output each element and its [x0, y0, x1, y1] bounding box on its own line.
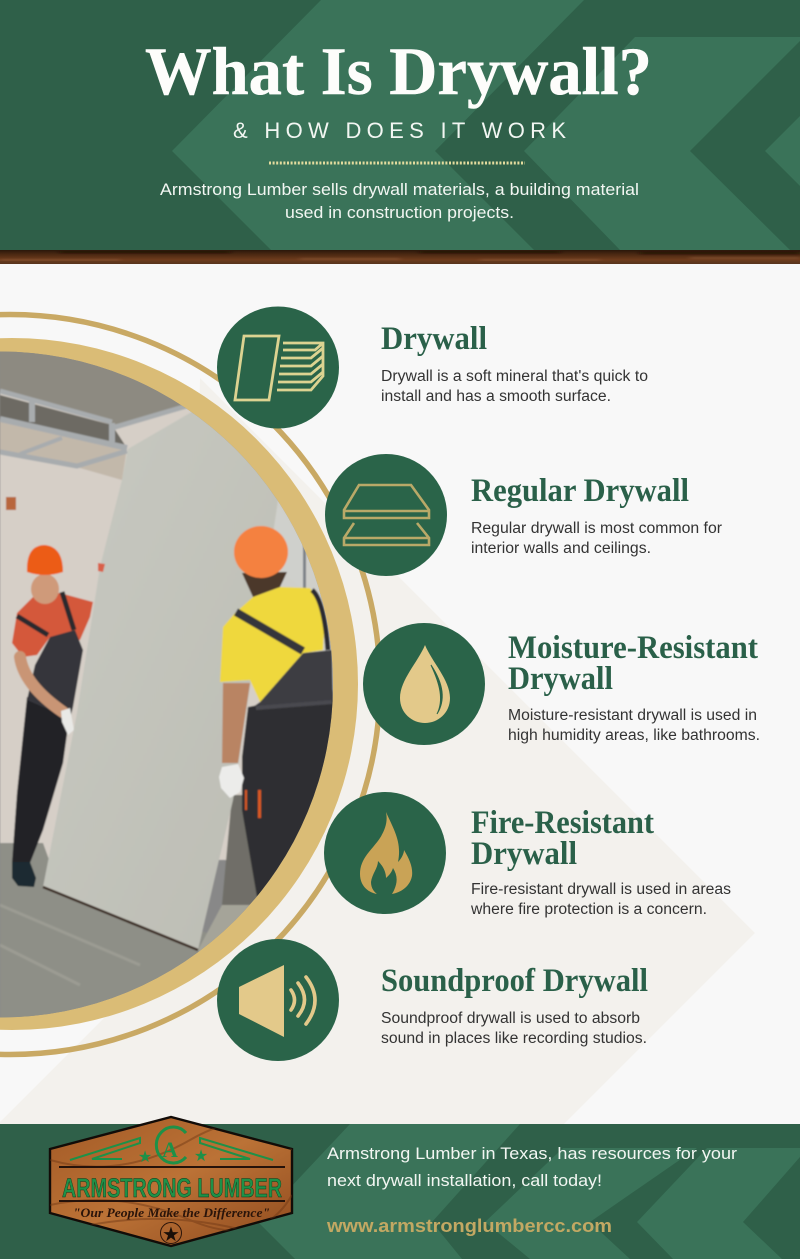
man right arm	[222, 683, 250, 763]
item 5 text: sound in places like recording studios.	[381, 1030, 647, 1047]
logo monogram letter: A	[162, 1137, 178, 1162]
item 2 icon: regular boards	[325, 454, 447, 576]
title: What Is Drywall?	[145, 33, 652, 109]
logo star badge	[160, 1222, 182, 1244]
man left shirt	[12, 593, 93, 657]
item 3 text	[508, 630, 760, 744]
item 1 text	[381, 321, 648, 405]
ceiling	[0, 352, 182, 425]
footer banner	[0, 1124, 800, 1259]
wood strip	[0, 250, 800, 264]
floor	[0, 842, 199, 1018]
item 5 icon: speaker	[217, 939, 339, 1061]
Armstrong Lumber logo: ★	[194, 1146, 208, 1165]
item 3 text: Moisture-Resistant	[508, 630, 758, 666]
item 2 text: Regular drywall is most common for	[471, 520, 722, 537]
man left legs	[12, 697, 68, 863]
man left glove	[61, 708, 74, 735]
item 1 text: Drywall	[381, 321, 487, 357]
man right helmet	[234, 526, 288, 578]
footer call to action: next drywall installation, call today!	[327, 1172, 602, 1190]
logo tagline: "Our People Make the Difference"	[73, 1205, 270, 1220]
intro paragraph	[160, 181, 639, 222]
man right straps	[236, 612, 303, 651]
logo stars: ★	[138, 1147, 152, 1166]
footer call to action	[327, 1145, 738, 1190]
item 4 text: Fire-Resistant	[471, 805, 654, 841]
item 2 text: interior walls and ceilings.	[471, 540, 651, 557]
gap beside board	[270, 505, 303, 590]
intro paragraph: used in construction projects.	[285, 204, 514, 222]
item 5 text	[381, 963, 648, 1047]
man left arm	[20, 657, 63, 712]
man right glove	[219, 764, 244, 798]
item 1 icon: drywall sheets	[217, 306, 339, 428]
man right overall bib	[253, 650, 333, 707]
item 4 text	[470, 805, 731, 918]
photo: two workers carrying a drywall sheet	[0, 352, 333, 1018]
man right neck	[242, 572, 287, 597]
man left helmet	[27, 545, 63, 575]
item 3 text: Moisture-resistant drywall is used in	[508, 707, 757, 724]
website url: www.armstronglumbercc.com	[326, 1215, 612, 1236]
man left shoe	[12, 862, 36, 887]
thick gold ring	[0, 338, 358, 1030]
intro paragraph: Armstrong Lumber sells drywall materials, a building material	[160, 181, 639, 199]
dotted divider	[269, 162, 525, 164]
item 5 text: Soundproof Drywall	[381, 963, 648, 999]
item 2 text: Regular Drywall	[471, 473, 689, 509]
man left face	[31, 574, 59, 604]
Armstrong Lumber logo	[50, 1117, 292, 1246]
item 3 icon: water drop	[363, 623, 485, 745]
header banner	[0, 0, 800, 250]
item 3 text: high humidity areas, like bathrooms.	[508, 727, 760, 744]
man left overalls	[27, 630, 83, 727]
wall socket	[6, 497, 16, 510]
outer thin gold ring	[0, 314, 380, 1054]
beige background chevron	[0, 378, 755, 1124]
ceiling frame	[0, 395, 125, 445]
Armstrong Lumber logo: ★	[162, 1222, 180, 1246]
dark column right of board	[222, 794, 257, 906]
logo wordmark: ARMSTRONG LUMBER	[62, 1173, 282, 1203]
item 4 text: where fire protection is a concern.	[470, 901, 707, 918]
wall	[0, 393, 261, 861]
item 4 text: Drywall	[471, 836, 577, 872]
item 2 text	[471, 473, 722, 557]
man right shirt	[220, 587, 325, 702]
item 5 text: Soundproof drywall is used to absorb	[381, 1010, 640, 1027]
right wall	[270, 480, 360, 900]
board	[42, 412, 278, 950]
item 4 icon: flame	[324, 792, 446, 914]
item 1 text: Drywall is a soft mineral that's quick to	[381, 368, 648, 385]
man right pants	[242, 690, 340, 900]
item 1 text: install and has a smooth surface.	[381, 388, 611, 405]
item 4 text: Fire-resistant drywall is used in areas	[471, 881, 731, 898]
item 3 text: Drywall	[508, 661, 613, 697]
subtitle: & HOW DOES IT WORK	[233, 118, 566, 143]
footer call to action: Armstrong Lumber in Texas, has resources for your	[327, 1145, 738, 1163]
